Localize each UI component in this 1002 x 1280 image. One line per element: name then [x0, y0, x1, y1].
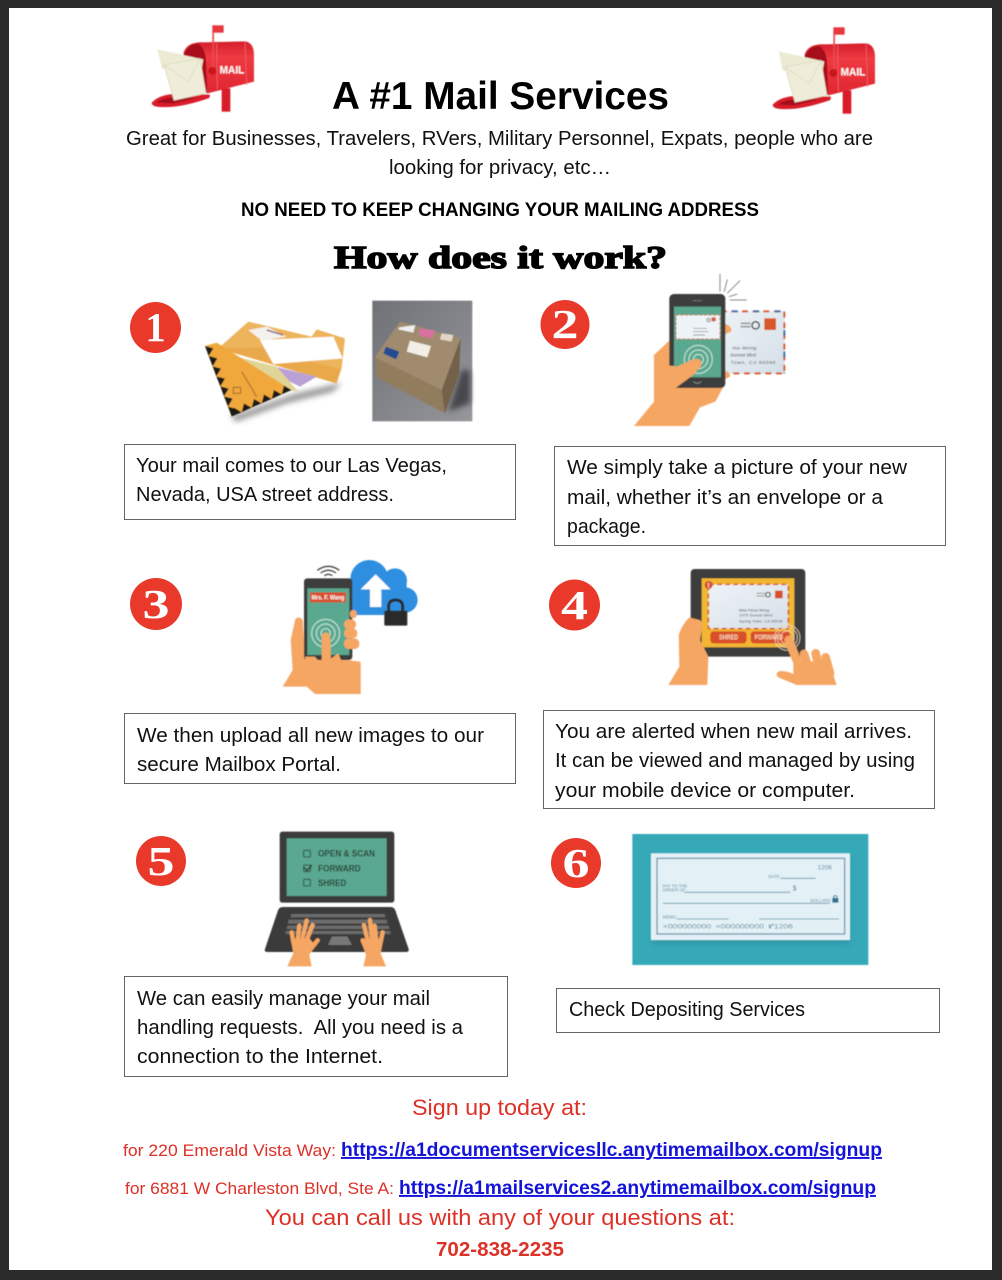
image: bank check: 1206	[818, 865, 832, 872]
step 4 description	[544, 710, 934, 808]
step 4 description: You are alerted when new mail arrives.	[555, 721, 912, 743]
phone number: 702-838-2235	[436, 1239, 564, 1261]
step 5 description: connection to the Internet.	[137, 1046, 383, 1068]
icon: mailbox right: MAIL	[841, 67, 866, 79]
call to action: sign up: Sign up today at:	[412, 1095, 587, 1120]
signup link line 2: https://a1mailservices2.anytimemailbox.com/signup	[399, 1178, 876, 1199]
icon: laptop with options: FORWARD	[318, 863, 361, 873]
call prompt: You can call us with any of your questions at:	[265, 1205, 735, 1230]
step 4 number	[549, 580, 600, 630]
step 6 description: Check Depositing Services	[569, 999, 805, 1021]
image: bank check: DATE	[768, 874, 780, 879]
step 2 description: mail, whether it’s an envelope or a	[567, 487, 884, 509]
step 1 description: Your mail comes to our Las Vegas,	[136, 455, 447, 477]
step 2 description: We simply take a picture of your new	[567, 457, 908, 479]
signup link line 2	[125, 1178, 876, 1199]
image: bank check: ORDER OF	[663, 888, 686, 893]
icon: phone photographing envelope: Sunset Blvd	[730, 353, 756, 359]
step 2 number: 2	[552, 301, 578, 347]
step 6 number: 6	[562, 840, 590, 886]
step 1 number	[130, 302, 181, 353]
icon: tablet with shred and forward: Miss Fiona Wong	[739, 609, 769, 613]
step 3 number	[130, 578, 182, 630]
step 3 description: We then upload all new images to our	[137, 725, 484, 747]
image: bank check: DOLLARS	[810, 898, 831, 903]
step 5 description	[124, 976, 508, 1076]
icon: mailbox right	[773, 27, 875, 114]
icon: phone uploading to cloud: Mrs. F. Wang	[312, 595, 345, 601]
step 3 number: 3	[142, 581, 170, 627]
step 4 description: your mobile device or computer.	[555, 780, 855, 802]
step 4 number: 4	[561, 582, 588, 628]
signup link line 1: https://a1documentservicesllc.anytimemailbox.com/signup	[341, 1140, 882, 1161]
icon: phone photographing envelope: ma Wong	[732, 345, 757, 351]
step 2 description: package.	[567, 516, 646, 538]
step 5 number: 5	[148, 838, 174, 884]
step 5 number	[136, 836, 186, 886]
icon: phone photographing envelope: Town, CA 90046	[731, 360, 776, 366]
step 5 description: handling requests. All you need is a	[137, 1017, 464, 1039]
image: bank check: PAY TO THE	[663, 883, 688, 888]
step 2 number	[540, 300, 590, 349]
signup link line 2: for 6881 W Charleston Blvd, Ste A:	[125, 1179, 394, 1198]
step 1 number: 1	[145, 304, 166, 350]
step 6 description	[556, 988, 940, 1032]
icon: phone uploading to cloud	[283, 560, 418, 694]
step 3 description	[124, 714, 516, 784]
step 1 description: Nevada, USA street address.	[136, 484, 394, 506]
heading: how does it work: How does it work?	[334, 239, 667, 275]
icon: laptop with options: OPEN & SCAN	[318, 849, 375, 859]
icon: tablet with shred and forward: !	[707, 582, 709, 589]
image: bank check	[632, 834, 868, 965]
step 1 description	[124, 444, 516, 520]
signup link line 1: for 220 Emerald Vista Way:	[123, 1141, 336, 1160]
icon: laptop with options: SHRED	[318, 878, 347, 888]
title: A #1 Mail Services	[332, 75, 669, 118]
step 2 description	[554, 446, 946, 546]
icon: tablet with shred and forward: Spring Town, CA 90046	[739, 619, 782, 623]
image: bank check: MEMO	[663, 915, 677, 920]
step 4 description: It can be viewed and managed by using	[555, 750, 915, 772]
intro text: looking for privacy, etc…	[389, 157, 611, 179]
subheading: NO NEED TO KEEP CHANGING YOUR MAILING ADDRESS	[241, 200, 759, 221]
step 3 description: secure Mailbox Portal.	[137, 754, 341, 776]
photo: package	[372, 301, 472, 421]
icon: mailbox left: MAIL	[220, 65, 245, 77]
intro text: Great for Businesses, Travelers, RVers, Military Personnel, Expats, people who are	[126, 128, 873, 150]
step 5 description: We can easily manage your mail	[137, 988, 430, 1010]
icon: laptop with options	[265, 832, 409, 966]
icon: tablet with shred and forward: 1975 Sunset Blvd	[739, 614, 772, 618]
icon: envelopes	[205, 322, 345, 422]
image: bank check: <000000000 <000000000 ⑈1206	[663, 924, 794, 931]
intro text	[126, 128, 873, 179]
icon: tablet with shred and forward: FORWARD	[755, 633, 783, 642]
image: bank check: $	[793, 885, 797, 892]
icon: tablet with shred and forward	[668, 569, 837, 685]
step 6 number	[551, 838, 601, 888]
icon: tablet with shred and forward: SHRED	[719, 633, 738, 642]
icon: mailbox left	[152, 25, 254, 112]
icon: phone photographing envelope	[634, 274, 785, 426]
